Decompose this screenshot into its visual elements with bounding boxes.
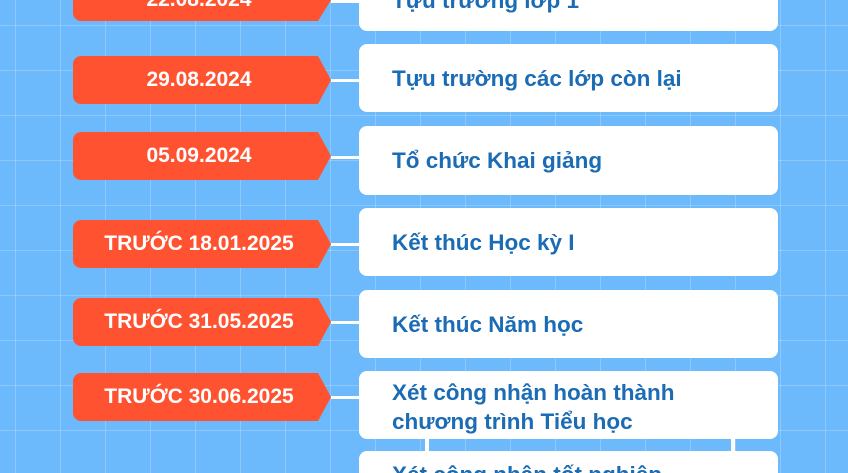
date 4 xyxy=(73,220,331,268)
date 2 xyxy=(73,56,331,104)
event 2 xyxy=(359,44,778,112)
event 4: Kết thúc Học kỳ I xyxy=(392,230,575,254)
date 5 xyxy=(73,298,331,346)
event 3: Tổ chức Khai giảng xyxy=(392,148,602,173)
date 6: TRƯỚC 30.06.2025 xyxy=(104,385,294,408)
row 4 xyxy=(73,208,778,276)
event 4 xyxy=(359,208,778,276)
date 3 xyxy=(73,132,331,180)
event 6: Xét công nhận hoàn thành xyxy=(392,380,674,405)
date 5: TRƯỚC 31.05.2025 xyxy=(104,310,294,333)
event 1 xyxy=(359,0,778,31)
event 7 xyxy=(359,451,778,473)
event 5 xyxy=(359,290,778,358)
date 2: 29.08.2024 xyxy=(146,68,252,91)
event 5: Kết thúc Năm học xyxy=(392,312,583,336)
date 4: TRƯỚC 18.01.2025 xyxy=(104,232,294,255)
row 6 xyxy=(73,371,778,439)
row 2 xyxy=(73,44,778,112)
event 3 xyxy=(359,126,778,195)
event 6 xyxy=(359,371,778,439)
date 3: 05.09.2024 xyxy=(146,144,252,167)
row 3 xyxy=(73,126,778,195)
event 6: chương trình Tiểu học xyxy=(392,409,633,434)
row 1 xyxy=(73,0,778,31)
event 2: Tựu trường các lớp còn lại xyxy=(392,66,682,90)
row 5 xyxy=(73,290,778,358)
date 1 xyxy=(73,0,331,21)
date 6 xyxy=(73,373,331,421)
